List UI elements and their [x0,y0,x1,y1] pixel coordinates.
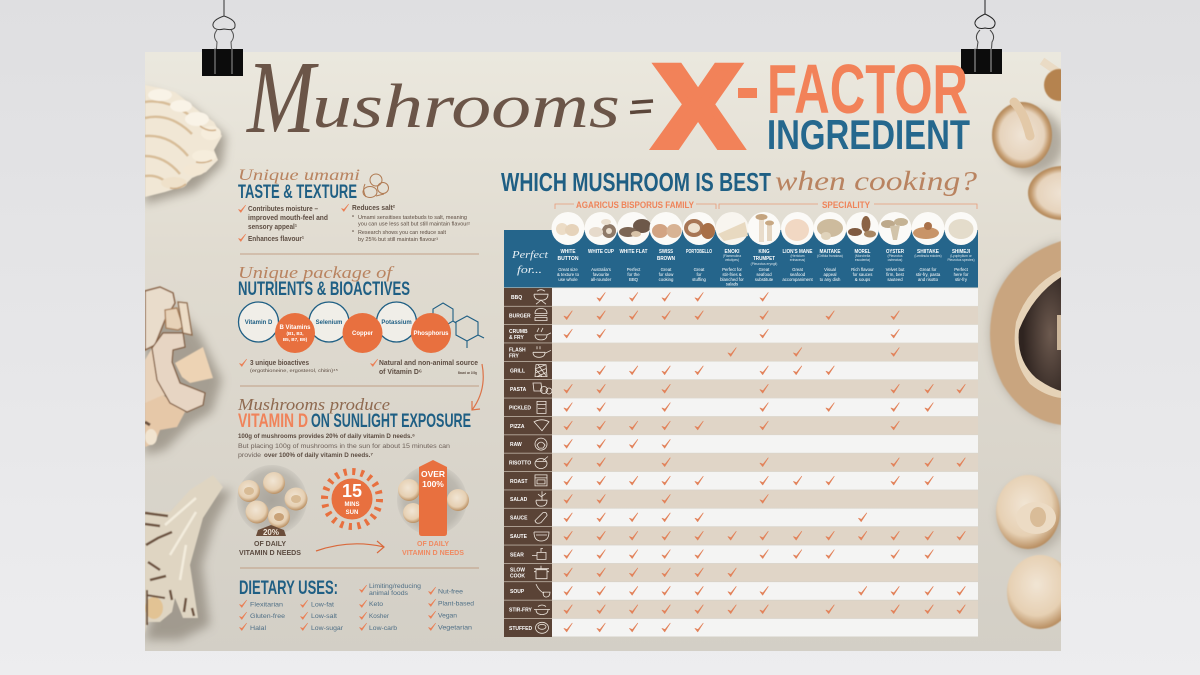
mushroom names and descriptions: salads [726,282,738,286]
heading: taste and texture: TASTE & TEXTURE [238,182,357,203]
row: Raw: RAW [510,442,522,448]
notes: bioactives and vitamin D source: Based on 100g [458,371,477,375]
text: vitamin D explanation: 100g of mushrooms provides 20% of daily vitamin D needs.⁶ [238,433,415,440]
arrow: sun to vitamin D [316,541,384,553]
mushroom names and descriptions: Visual [824,267,836,272]
mushroom names and descriptions: blanched for [720,277,744,282]
notes: bioactives and vitamin D source: of Vitamin D⁶ [379,369,422,376]
row: Pizza: PIZZA [510,424,525,430]
heading: vitamin D [237,395,471,432]
mushroom names and descriptions: Rich flavour [851,267,874,272]
nutrient circles: (B1, B3, [286,331,304,336]
mushroom names and descriptions: for [696,272,702,277]
list: texture benefits: Enhances flavour¹ [248,236,305,243]
icon: molecule [433,303,484,348]
notes: bioactives and vitamin D source [240,359,478,376]
mushroom names and descriptions: Great [661,267,672,272]
photo: portobello right [990,241,1062,425]
mushroom names and descriptions: (Morchella [855,254,870,258]
nutrient circles: Phosphorus [413,331,449,337]
row: Stir-fry [504,600,978,619]
mushroom names and descriptions: (Hericium [790,254,805,258]
nutrient circles: B Vitamins [280,325,311,331]
mushroom names and descriptions: accompaniment [782,277,813,282]
row: Slow cook: SLOW [510,568,525,574]
photo: white button mushrooms right [995,474,1061,630]
list: dietary uses: Nut-free [438,588,463,596]
list: dietary uses [240,583,474,632]
mushroom names and descriptions: WHITE CUP [588,249,614,255]
title: X-Factor Ingredient: FACTOR [767,50,968,128]
table header band: Perfect [511,249,549,261]
mushroom names and descriptions: to any dish [820,277,841,282]
mushroom names and descriptions: BBQ [629,277,639,282]
mushroom names and descriptions: BROWN [657,256,675,262]
heading: vitamin D: Mushrooms produce [237,395,390,414]
row: Flash fry: FRY [509,353,519,359]
mushroom names and descriptions: (Flammulina [723,254,741,258]
heading: nutrients and bioactives: Unique package of [238,263,395,282]
mushroom names and descriptions: KING [758,249,770,255]
poster sheet [145,52,1061,651]
left column of table [504,288,552,637]
mushroom names and descriptions: & soups [855,277,870,282]
row: Risotto [504,454,978,472]
list: dietary uses: Low-salt [311,613,337,620]
notes: bioactives and vitamin D source: (ergothioneine, ergosterol, chitin)⁴⁵ [250,368,338,374]
row: Burger [504,306,978,325]
list: dietary uses: Vegetarian [438,624,472,632]
row: Crumb and fry [504,325,978,343]
plate: 20 percent: 20% [263,528,279,537]
mushroom names and descriptions: Perfect [627,267,641,272]
row: Raw [504,435,978,454]
row: Soup: SOUP [510,589,525,595]
row: Stir-fry: STIR-FRY [509,608,533,614]
row: Pasta [504,380,978,398]
table header band [504,230,978,288]
mushroom names and descriptions: cooking [659,277,674,282]
mushroom names and descriptions: ostreatus) [888,258,902,262]
table header band: for... [517,264,542,276]
mushroom names and descriptions: firm, best [886,272,905,277]
panel: nutrients and bioactives [238,263,484,376]
heading: taste and texture [238,167,360,203]
title: Mushrooms =: ushrooms [312,73,620,141]
mushroom names and descriptions: all-rounder [591,277,612,282]
mushroom names and descriptions: for sauces [853,272,872,277]
mushroom names and descriptions: for the [627,272,640,277]
mushroom names and descriptions: SHIMEJI [952,249,970,255]
row: Sauce [504,509,978,527]
mushroom names and descriptions: OYSTER [886,249,905,255]
nutrient circles [238,302,451,353]
mushroom names and descriptions: here for [954,272,969,277]
plate: 20 percent [237,465,308,557]
mushroom names and descriptions: & texture to [557,272,580,277]
row: Flash fry [504,343,978,362]
mushroom names and descriptions: Perfect for [722,267,742,272]
mushroom names and descriptions: Great [759,267,770,272]
list: dietary uses: Low-carb [369,625,397,632]
mushroom names and descriptions: substitute [755,277,774,282]
row: Grill [504,362,978,380]
plate: over 100 percent: OVER [421,469,445,479]
heading: nutrients and bioactives: NUTRIENTS & BIOACTIVES [238,279,410,300]
nutrient circles: Selenium [316,320,342,326]
mushroom names and descriptions: TRUMPET [753,256,775,262]
mushroom names and descriptions: Great size [558,267,578,272]
icon: sun 15 mins: SUN [346,510,358,516]
mushroom names and descriptions: erinaceus) [790,258,805,262]
list: dietary uses: Limiting/reducing [369,583,421,590]
row: Burger: BURGER [509,314,531,320]
text: vitamin D explanation: provide [238,452,261,459]
row: Soup [504,582,978,600]
mushroom names and descriptions: for slow [659,272,674,277]
heading: vitamin D: VITAMIN D [238,411,308,432]
row: Salad: SALAD [510,497,528,503]
row: Salad [504,490,978,509]
mushroom names and descriptions: and risotto [918,277,939,282]
mushroom names and descriptions: Australia's [591,267,611,272]
photo: shiitake right [991,58,1061,220]
mushroom names and descriptions: stuffing [692,277,706,282]
mushroom names and descriptions: sauteed [887,277,903,282]
plate: 20 percent: VITAMIN D NEEDS [239,548,301,557]
mushroom names and descriptions: use whole [558,277,578,282]
heading: dietary uses: DIETARY USES: [239,578,338,599]
mushroom names and descriptions: seafood [756,272,772,277]
row: Risotto: RISOTTO [509,460,531,466]
title: X-Factor Ingredient: INGREDIENT [767,111,970,158]
row: Crumb and fry: CRUMB [509,329,528,335]
heading: vitamin D: ON SUNLIGHT EXPOSURE [311,411,471,432]
list: texture benefits: Umami sensitises tastebuds to salt, meaning [358,215,467,221]
row: Slow cook: COOK [510,574,525,580]
mushroom names and descriptions: Great [694,267,705,272]
mushroom names and descriptions: MAITAKE [820,249,841,255]
mushroom names and descriptions: WHITE [560,249,576,255]
panel: vitamin D sunlight [237,395,471,557]
list: dietary uses: Low-fat [311,602,334,608]
photo: maitake left [145,475,232,640]
mushroom names and descriptions: Pleurotus species) [947,258,975,262]
binder clip right [961,0,1002,74]
list: texture benefits: by 25% but still maintain flavour³ [358,237,438,243]
icon: sun 15 mins: 15 [342,481,362,501]
panel: taste and texture [238,167,470,243]
title: Mushrooms =: M [245,40,319,155]
mushroom names and descriptions: velutipes) [725,258,739,262]
photo: sliced mushrooms left [145,287,222,455]
row: Pasta: PASTA [510,387,527,393]
mushroom names and descriptions: LION'S MANE [782,249,813,255]
list: texture benefits: Research shows you can reduce salt [358,230,447,236]
mushroom names and descriptions: Velvet but [886,267,905,272]
mushroom names and descriptions: stir-fry [955,277,968,282]
mushroom names and descriptions: ENOKI [724,249,740,255]
row: Roast: ROAST [510,479,528,485]
heading: nutrients and bioactives [238,263,410,300]
mushroom photo circles [552,212,978,245]
list: texture benefits: Reduces salt² [352,205,396,212]
mushroom names and descriptions: (Pleurotus [887,254,903,258]
row: Sauce: SAUCE [510,516,528,522]
notes: bioactives and vitamin D source: Natural and non-animal source [379,360,478,367]
row: BBQ [504,288,978,307]
mushroom names and descriptions: SHIITAKE [917,249,939,255]
row: BBQ: BBQ [511,295,522,301]
mushroom names and descriptions: Great [792,267,804,272]
row: Saute [504,527,978,545]
plate: over 100 percent: OF DAILY [417,539,449,548]
list: texture benefits: sensory appeal¹ [248,224,298,231]
mushroom names and descriptions: seafood [790,272,806,277]
list: dietary uses: Kosher [369,613,390,620]
arrow: curved to vitamin section [472,364,483,410]
mushroom names and descriptions: WHITE FLAT [620,249,648,255]
list: texture benefits: Contributes moisture – [248,206,318,213]
list: dietary uses: Halal [250,625,267,632]
list: dietary uses: Low-sugar [311,625,344,632]
row: Sear [504,545,978,564]
list: texture benefits: you can use less salt but still maintain flavour² [358,222,470,228]
title: Mushrooms = [245,40,653,155]
list: dietary uses: Gluten-free [250,613,285,620]
binder clip left [202,0,243,76]
title: X-Factor Ingredient [656,43,970,171]
row: Slow cook [504,564,978,582]
panel: dietary uses [239,578,474,632]
list: dietary uses: Flexitarian [250,602,283,608]
row: Saute: SAUTE [510,534,528,540]
photo: enoki cluster top left [145,85,226,204]
row: Flash fry: FLASH [509,347,526,353]
row: Pizza [504,417,978,435]
mushroom names and descriptions: favourite [593,272,610,277]
plate: 20 percent: OF DAILY [254,539,286,548]
text: vitamin D explanation: over 100% of daily vitamin D needs.⁷ [264,452,373,459]
row: Crumb and fry: & FRY [509,335,524,341]
row: Stuffed: STUFFED [509,626,532,632]
mushroom names and descriptions: Great for [920,267,937,272]
mushroom names and descriptions: PORTOBELLO [686,249,712,255]
plate: over 100 percent: 100% [422,479,444,489]
list: dietary uses: Vegan [438,612,457,620]
heading: taste and texture: Unique umami [238,167,360,184]
list: dietary uses: animal foods [369,590,409,597]
mushroom names and descriptions: (Lyophyllum or [950,254,973,258]
heading: which mushroom is best when cooking: WHICH MUSHROOM IS BEST [501,167,771,197]
title: X-Factor Ingredient: X [656,43,740,171]
mushroom names and descriptions: stir-fry, pasta [916,272,941,277]
mushroom names and descriptions: appeal [824,272,836,277]
mushroom names and descriptions: esculenta) [855,258,870,262]
mushroom names and descriptions: SWISS [659,249,673,255]
row: Roast [504,472,978,490]
family labels with brackets: SPECIALITY [822,200,871,211]
mushroom names and descriptions: (Pleurotus eryngii) [751,262,777,266]
family labels with brackets: AGARICUS BISPORUS FAMILY [576,200,695,211]
list: dietary uses: Keto [369,601,383,608]
row: Stuffed [509,619,978,636]
row: Pickled: PICKLED [509,405,531,411]
mushroom names and descriptions: MOREL [854,249,871,255]
nutrient circles: B5, B7, B9) [283,337,308,342]
row: Sear: SEAR [510,552,524,558]
mushroom names and descriptions: BUTTON [558,256,578,262]
list: texture benefits: improved mouth-feel and [248,215,328,222]
plate: over 100 percent: VITAMIN D NEEDS [402,548,464,557]
notes: bioactives and vitamin D source: 3 unique bioactives [250,360,309,367]
mushroom names and descriptions: (Grifola frondosa) [817,254,843,258]
text: vitamin D explanation [238,433,450,459]
icon: mushroom outline [363,174,388,198]
nutrient circles: Copper [352,331,374,337]
mushroom names and descriptions: Perfect [954,267,969,272]
nutrient circles: Vitamin D [245,320,273,326]
mushroom names and descriptions: stir-fries & [722,272,742,277]
nutrient circles: Potassium [381,320,412,326]
heading: which mushroom is best when cooking: when cooking? [775,166,978,196]
plate: over 100 percent [397,460,469,557]
icon: sun 15 mins: MINS [344,502,360,508]
family labels with brackets [555,200,977,211]
row: Grill: GRILL [510,369,525,375]
row: Pickled [504,398,978,417]
mushroom names and descriptions: (Lentinula edodes) [914,254,942,258]
list: texture benefits [238,204,470,243]
list: dietary uses: Plant-based [438,600,474,608]
mushroom names and descriptions [557,249,975,286]
text: vitamin D explanation: But placing 100g of mushrooms in the sun for about 15 minutes can [238,443,450,450]
icon: sun 15 mins [324,472,380,526]
